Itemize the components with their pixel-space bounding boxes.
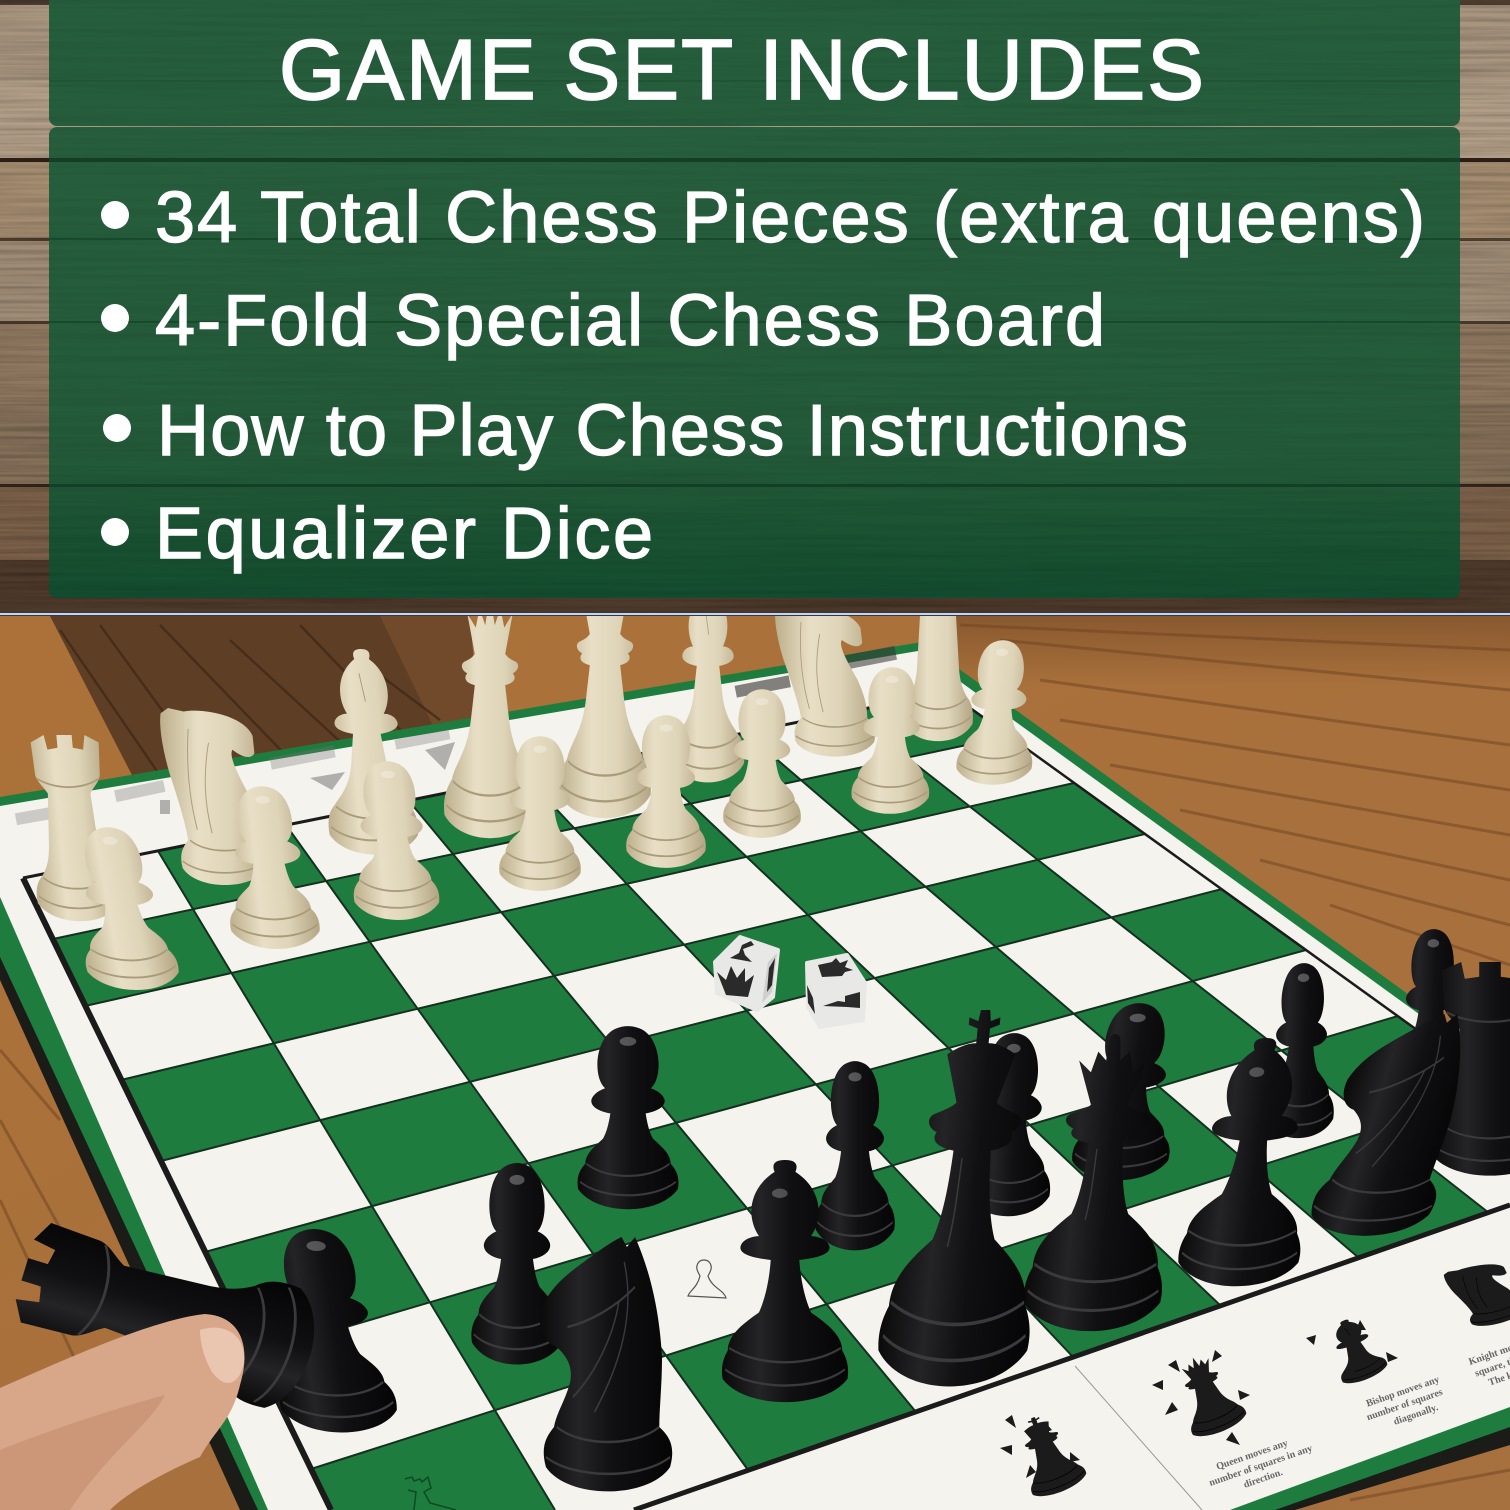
- text: queen rule: number of squares in any: [1208, 1443, 1314, 1489]
- white pawn 8: [956, 640, 1032, 785]
- board white margin: [0, 651, 1510, 1510]
- black pawn far right: [1393, 929, 1469, 1099]
- black pawn centre: [578, 1026, 678, 1209]
- white pawn 2: [230, 786, 320, 949]
- black king: [874, 1010, 1061, 1386]
- black pawn near hand: [256, 1229, 401, 1432]
- text: queen rule: direction.: [1242, 1467, 1285, 1491]
- icon: king movement: [1000, 1407, 1089, 1502]
- chess board grid: [23, 692, 1510, 1510]
- white bishop 1: [328, 649, 418, 854]
- bullet item: instructions: How to Play Chess Instructions: [157, 391, 1188, 471]
- bullet item: chess board: 4-Fold Special Chess Board: [155, 281, 1105, 361]
- text: bishop rule: Bishop moves any: [1365, 1374, 1441, 1410]
- text: queen rule: Queen moves any: [1215, 1438, 1289, 1473]
- black pawn behind king: [967, 1033, 1056, 1216]
- white pawn 5: [626, 715, 706, 868]
- black rook right edge: [1432, 962, 1510, 1176]
- panel: list of contents: [49, 127, 1460, 598]
- printed instructions strip: [405, 1255, 1510, 1510]
- chess pieces: black army: [6, 929, 1510, 1491]
- die with queen and pawn: [715, 937, 778, 1010]
- white queen: [444, 616, 526, 838]
- grid lines: [53, 712, 1500, 1510]
- title: GAME SET INCLUDES: [279, 23, 1204, 118]
- black knight right: [1299, 1014, 1493, 1236]
- black pawn left: [471, 1163, 563, 1364]
- bullet item: dice: Equalizer Dice: [155, 494, 653, 574]
- white pawn 7: [851, 667, 931, 814]
- wooden plank background: [0, 0, 1510, 612]
- black bishop front: [722, 1160, 848, 1402]
- black pawn behind queen: [1069, 1003, 1188, 1180]
- white rook 1: [30, 735, 106, 922]
- grid outer border: [23, 692, 1510, 1510]
- text: bishop rule: diagonally.: [1392, 1402, 1440, 1428]
- panel: title banner: [49, 0, 1460, 126]
- black pawn centre right: [815, 1061, 895, 1250]
- white bishop 2: [682, 616, 744, 782]
- text: bishop rule: number of squares: [1365, 1387, 1444, 1423]
- dice pair: [715, 937, 865, 1027]
- green squares: [53, 692, 1500, 1510]
- icon: knight silhouette: [1443, 1255, 1510, 1334]
- black bishop right: [1175, 1038, 1327, 1286]
- chess pieces: white army: [30, 616, 1032, 990]
- white pawn 3: [354, 761, 440, 920]
- black knight front: [540, 1237, 672, 1491]
- printed guide marks on far margin: [15, 646, 897, 825]
- white pawn 4: [499, 736, 581, 891]
- black pawn 1: [1263, 963, 1339, 1138]
- white pawn 1: [85, 827, 179, 990]
- white rook 2: [909, 616, 973, 742]
- white knight 2: [775, 604, 875, 757]
- white knight 1: [160, 708, 254, 885]
- icon: printed pawn outline: [688, 1260, 726, 1298]
- held black rook: [6, 1209, 328, 1417]
- board outer shadow edge: [0, 900, 1510, 1510]
- wooden table: [0, 616, 1510, 1510]
- white king: [559, 616, 651, 818]
- black queen: [1021, 1034, 1184, 1331]
- icon: queen movement: [1152, 1347, 1250, 1445]
- panel separator: [1075, 1366, 1202, 1510]
- white pawn 6: [723, 689, 801, 838]
- icon: printed rook outline: [405, 1477, 456, 1510]
- divider line: [0, 612, 1510, 616]
- die with king and knight: [807, 955, 865, 1027]
- chalkboard plank texture: [49, 0, 1460, 598]
- board green border: [0, 642, 1510, 1510]
- icon: bishop movement: [1306, 1311, 1398, 1388]
- hand holding rook: [0, 1314, 245, 1510]
- bullet item: chess pieces: 34 Total Chess Pieces (extra queens): [155, 178, 1425, 258]
